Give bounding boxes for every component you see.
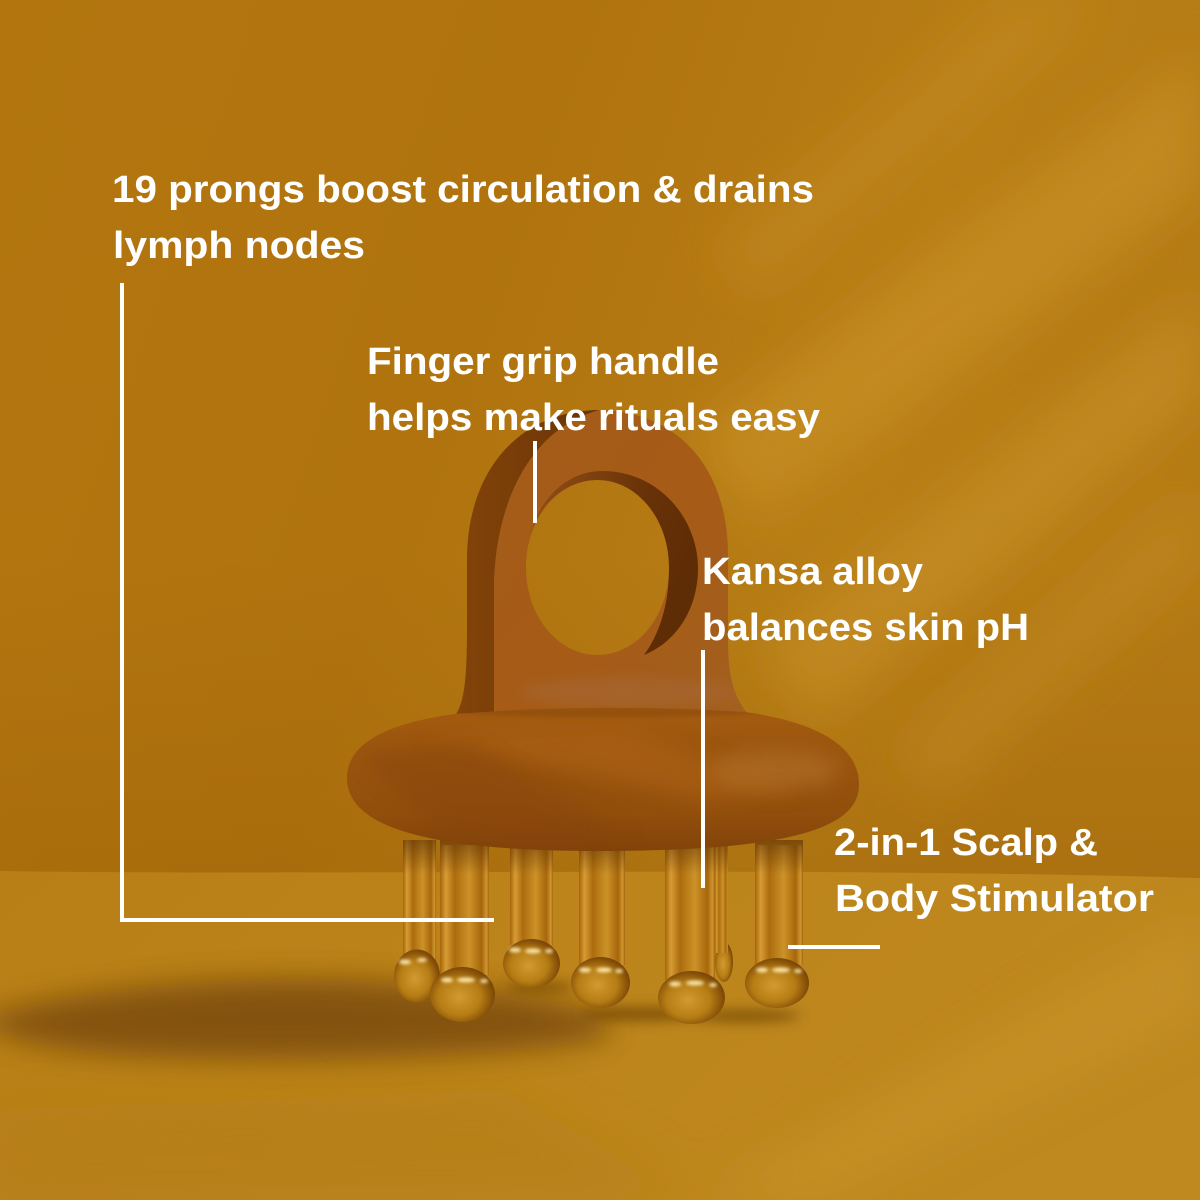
wall light streaks [690, 0, 1200, 800]
heading: alloy: balances skin pH [702, 607, 1029, 649]
wood grain [397, 708, 835, 798]
background wall [0, 0, 1200, 880]
heading: handle [367, 341, 820, 439]
leader line: stimulator [788, 945, 880, 949]
handle front face [494, 410, 750, 716]
background floor [0, 871, 1200, 1200]
prong shade under base [403, 840, 803, 870]
callout: alloy [702, 551, 1029, 888]
callout: stimulator [788, 822, 1154, 947]
handle lower highlight [520, 678, 740, 706]
heading: stimulator [834, 822, 1154, 920]
heading: stimulator: 2-in-1 Scalp & [834, 822, 1098, 864]
handle side [455, 410, 600, 716]
heading: prongs [112, 169, 814, 267]
heading: handle: Finger grip handle [367, 341, 719, 383]
back prongs [394, 840, 733, 1002]
heading: prongs: 19 prongs boost circulation & drains [112, 169, 814, 211]
heading: prongs: lymph nodes [113, 225, 365, 267]
heading: stimulator: Body Stimulator [835, 878, 1154, 920]
cast shadow [0, 979, 611, 1059]
leader line: prongs [122, 283, 494, 920]
heading: alloy: Kansa alloy [702, 551, 923, 593]
heading: alloy [702, 551, 1029, 649]
callout: handle [367, 341, 820, 523]
wooden handle with finger hole [455, 410, 750, 716]
callout: prongs [112, 169, 814, 920]
hole inner rim [527, 471, 698, 655]
prong contact shadows [506, 982, 800, 1022]
front prongs [430, 845, 809, 1024]
wooden base [347, 707, 859, 851]
leader line: handle [533, 441, 537, 523]
ball highlights [399, 948, 802, 987]
product: scalp massager [347, 410, 859, 1024]
leader line: alloy [701, 650, 705, 888]
floor light streaks [0, 920, 1200, 1200]
heading: handle: helps make rituals easy [367, 397, 820, 439]
